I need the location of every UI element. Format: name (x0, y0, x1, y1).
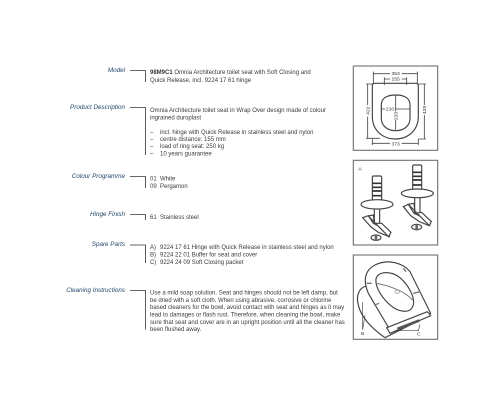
label: hinge finish: Hinge Finish (90, 211, 125, 218)
dimension values (365, 71, 428, 147)
dimension lines (366, 72, 426, 145)
lid (365, 262, 431, 330)
callouts B and C: C (417, 331, 421, 337)
text: product description: ingrained duroplast (150, 116, 201, 122)
callouts B and C: B (361, 331, 365, 337)
text: hinge finish: Stainless steel (160, 215, 199, 221)
callouts B and C (361, 302, 421, 337)
label: spare parts: Spare Parts (92, 241, 126, 248)
section: model (108, 67, 311, 84)
dimension values: 429 (422, 106, 428, 114)
seat outline (372, 83, 418, 139)
text: product description: – (150, 137, 154, 143)
text: product description: – (150, 144, 154, 150)
dimension values: 422 (365, 106, 371, 115)
text: product description: 10 years guarantee (160, 152, 212, 158)
dimension values: 353 (392, 71, 400, 77)
text: cleaning instructions: lead to damages or flash rust. Therefore, when cleaning the bowl, make (150, 312, 341, 318)
text: colour programme: 01 (150, 176, 157, 182)
text: cleaning instructions: based cleaners for the bowl, avoid contact with seat and hinges as it may (150, 305, 344, 311)
text: spare parts: B) (150, 252, 156, 258)
buffers (367, 268, 420, 305)
dimension values: 210 (386, 107, 394, 113)
section: cleaning instructions (66, 287, 345, 333)
connector: product description (130, 108, 146, 155)
text: spare parts: 9224 17 61 Hinge with Quick Release in stainless steel and nylon (160, 245, 334, 251)
connector: spare parts (130, 245, 146, 263)
label: product description: Product Description (70, 104, 125, 111)
text: product description: – (150, 152, 154, 158)
text: cleaning instructions: been flushed away. (150, 327, 202, 333)
text: model: 98M9C1 Omnia Architecture toilet seat with Soft Closing and (150, 70, 311, 76)
text: colour programme: Pergamon (160, 184, 188, 190)
dimension values: 155 (392, 77, 400, 83)
text: colour programme: White (160, 176, 176, 182)
text: spare parts: 9224 24 09 Soft Closing packet (160, 260, 244, 266)
text: cleaning instructions: be dried with a soft cloth. When using abrasive, corrosive or chlorine (150, 298, 332, 304)
bowl rim detail (376, 283, 413, 300)
dimension values: 373 (392, 141, 400, 147)
panel: dimension drawing (353, 66, 438, 150)
lid hole (376, 273, 414, 311)
text: product description: – (150, 130, 154, 136)
panel: seat perspective (353, 255, 438, 339)
text: hinge finish: 61 (150, 215, 157, 221)
hinge right (401, 165, 433, 230)
lower seat (357, 286, 430, 338)
panel: hinges (353, 160, 438, 245)
text: product description: centre distance: 155 mm (160, 137, 226, 143)
text: model: Quick Release, incl. 9224 17 61 hinge (150, 78, 252, 84)
text: product description: Omnia Architecture toilet seat in Wrap Over design made of colour (150, 108, 326, 114)
connector: cleaning instructions (130, 290, 146, 330)
section: spare parts (92, 241, 334, 266)
text: product description: load of ring seat: 250 kg (160, 144, 224, 150)
text: spare parts: A) (150, 245, 156, 251)
panel letter A: A (358, 166, 362, 172)
label: cleaning instructions: Cleaning Instructions (66, 287, 126, 294)
connector: hinge finish (130, 214, 146, 220)
label: colour programme: Colour Programme (72, 173, 125, 180)
label: model: Model (108, 67, 126, 74)
text: cleaning instructions: sure that seat and cover are in an upright position until all the cleaner has (150, 320, 345, 326)
hinge left (361, 176, 393, 241)
connector: colour programme (130, 176, 146, 188)
text: spare parts: C) (150, 260, 156, 266)
text: cleaning instructions: Use a mild soap solution. Seat and hinges should not be left damp, but (150, 290, 338, 296)
seat hole (381, 95, 410, 131)
text: colour programme: 09 (150, 184, 157, 190)
hinge bar (387, 312, 431, 333)
section: hinge finish (90, 211, 199, 221)
text: spare parts: 9224 22 01 Buffer for seat and cover (160, 252, 257, 258)
connector: model (130, 70, 146, 82)
section: product description (70, 104, 326, 158)
dimension values: 233 (393, 112, 399, 120)
section: colour programme (72, 173, 188, 190)
text: product description: incl. hinge with Quick Release in stainless steel and nylon (160, 130, 313, 136)
